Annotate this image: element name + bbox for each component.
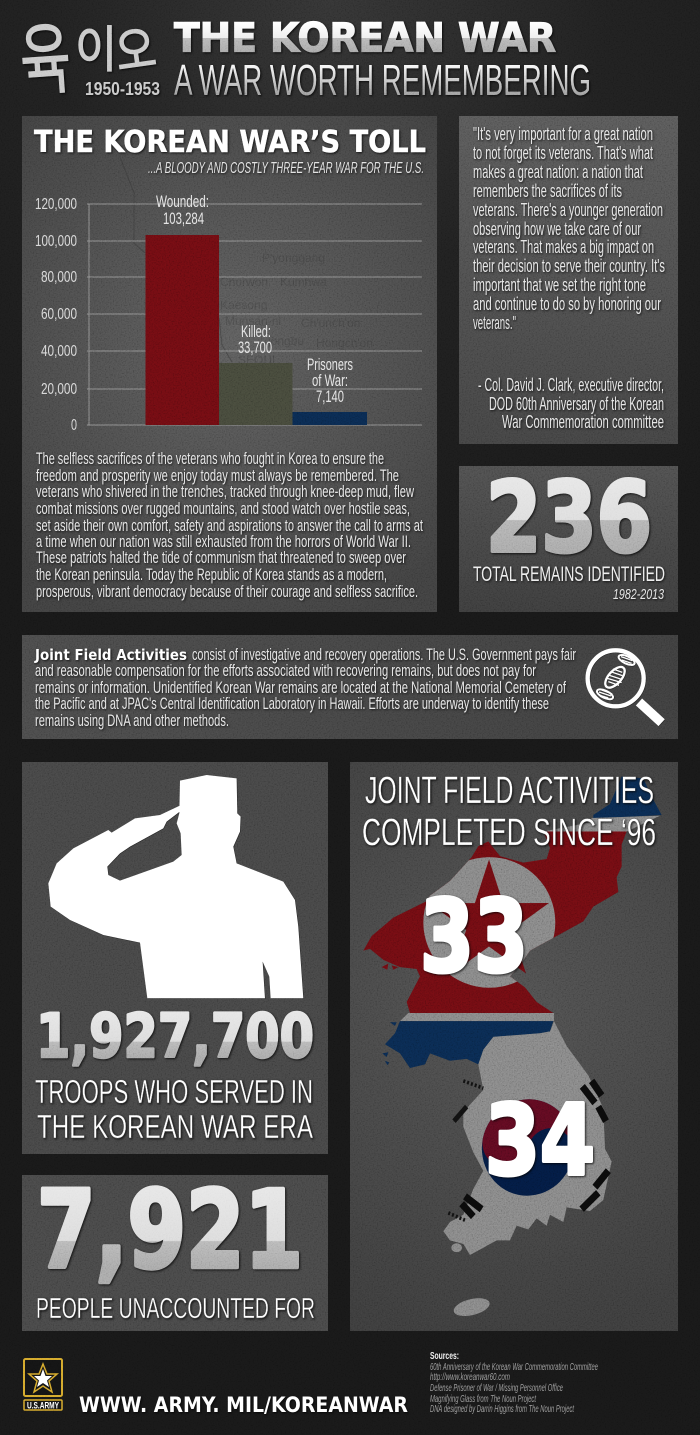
- body text: prosperous, vibrant democracy because of their courage and selfless sacrifice.: [36, 582, 418, 601]
- title: THE KOREAN WAR: [174, 16, 556, 62]
- bar chart: Hongch'on: [316, 336, 373, 350]
- date range: 1982-2013: [613, 586, 664, 603]
- body text: set aside their own comfort, safety and aspirations to answer the call to arms at: [36, 516, 423, 535]
- bar: wounded: [146, 235, 219, 425]
- years: 1950-1953: [85, 79, 160, 99]
- sources: Defense Prisoner of War / Missing Personnel Office: [430, 1382, 563, 1394]
- subheading: ...A BLOODY AND COSTLY THREE-YEAR WAR FOR THE U.S.: [148, 160, 424, 177]
- body text: combat missions over rugged mountains, and stood watch over hostile seas,: [36, 499, 410, 518]
- bar labels: of War:: [312, 371, 348, 390]
- header: [16, 0, 591, 112]
- axis labels: 0: [71, 417, 77, 434]
- sources: http://www.koreanwar60.com: [430, 1371, 510, 1383]
- panel: the korean war's toll: [22, 116, 437, 612]
- panel: remains identified: [459, 461, 678, 612]
- bar: killed: [219, 363, 292, 425]
- troops label: TROOPS WHO SERVED IN: [35, 1073, 313, 1110]
- description text: Joint Field Activities: [34, 646, 187, 664]
- panel: people unaccounted for: [22, 1169, 328, 1331]
- logo: u.s. army: [24, 1359, 62, 1410]
- number unaccounted: 7,921: [37, 1169, 303, 1293]
- number of troops: 1,927,700: [36, 1001, 314, 1072]
- body text: [36, 449, 423, 601]
- heading: THE KOREAN WAR’S TOLL: [34, 125, 426, 160]
- bar labels: Wounded:: [156, 192, 209, 211]
- bar: prisoners of war: [292, 412, 367, 425]
- bar labels: [156, 192, 353, 406]
- quote text: veterans.": [473, 312, 516, 333]
- number south korea: 34: [485, 1084, 595, 1197]
- bar chart: SEOUL: [238, 353, 279, 367]
- description text: remains using DNA and other methods.: [35, 711, 229, 730]
- axis labels: 120,000: [35, 196, 77, 213]
- panel: troops served: [22, 762, 328, 1154]
- north korea star: [429, 860, 549, 974]
- panel: joint field activities: [22, 635, 678, 739]
- sources: [430, 1350, 598, 1415]
- map heading: [362, 770, 656, 854]
- troops label: THE KOREAN WAR ERA: [37, 1108, 313, 1145]
- korean characters: yugio: [16, 0, 160, 112]
- south korea flag map: [443, 1021, 612, 1319]
- axis labels: 100,000: [35, 233, 77, 250]
- bar labels: 7,140: [316, 387, 344, 406]
- bar chart: jongbu: [267, 334, 304, 348]
- body text: The selfless sacrifices of the veterans who fought in Korea to ensure the: [36, 449, 384, 468]
- axis labels: 60,000: [41, 306, 77, 323]
- bar chart: [35, 157, 422, 434]
- bar labels: 33,700: [238, 338, 272, 357]
- axis labels: 20,000: [41, 381, 77, 398]
- axis labels: [35, 196, 77, 434]
- quote text: [473, 123, 665, 333]
- bar chart: Munsan-ni: [225, 314, 281, 328]
- bar chart: Kaesong: [220, 298, 267, 312]
- unaccounted label: PEOPLE UNACCOUNTED FOR: [36, 1293, 315, 1325]
- bar labels: 103,284: [163, 209, 204, 228]
- panel: joint field activities map: [350, 762, 678, 1331]
- korean characters: yugio: 육: [16, 0, 74, 112]
- sources: Sources:: [430, 1350, 459, 1362]
- axis labels: 80,000: [41, 269, 77, 286]
- number 236: 236: [486, 461, 652, 574]
- bar chart: P'yonggang: [262, 251, 325, 265]
- description text: [34, 645, 576, 730]
- north korea flag map: [363, 777, 662, 1068]
- korea map: [363, 777, 662, 1319]
- body text: These patriots halted the tide of communism that threatened to sweep over: [36, 548, 406, 567]
- panel: quote: [459, 116, 678, 444]
- sources: DNA designed by Darrin Higgins from The Noun Project: [430, 1403, 575, 1415]
- body text: freedom and prosperity we enjoy today must always be remembered. The: [36, 466, 399, 485]
- bar labels: Killed:: [241, 322, 271, 341]
- troops label: [35, 1073, 313, 1145]
- body text: the Korean peninsula. Today the Republic of Korea stands as a modern,: [36, 565, 387, 584]
- bar chart: Kumhwa: [280, 275, 327, 289]
- korean characters: yugio: 오: [110, 7, 160, 86]
- body text: veterans who shivered in the trenches, tracked through knee-deep mud, flew: [36, 482, 414, 501]
- body text: a time when our nation was still exhausted from the horrors of World War II.: [36, 532, 411, 551]
- korean characters: yugio: 이: [75, 9, 117, 82]
- quote attribution: [478, 374, 664, 432]
- bar chart: Ch'unch'on: [301, 316, 360, 330]
- bar chart: Chorwon: [220, 275, 268, 289]
- website url: WWW. ARMY. MIL/KOREANWAR: [79, 1393, 408, 1417]
- sources: Magnifying Glass from The Noun Project: [430, 1393, 537, 1405]
- bar labels: Prisoners: [307, 355, 353, 374]
- axis labels: 40,000: [41, 343, 77, 360]
- number north korea: 33: [420, 878, 528, 995]
- icon: saluting soldier: [48, 775, 303, 998]
- south korea taegeuk: [473, 1091, 583, 1204]
- footer: [24, 1350, 598, 1417]
- logo: u.s. army: U.S.ARMY: [27, 1400, 59, 1410]
- icon: magnifying glass with dna: [588, 650, 662, 723]
